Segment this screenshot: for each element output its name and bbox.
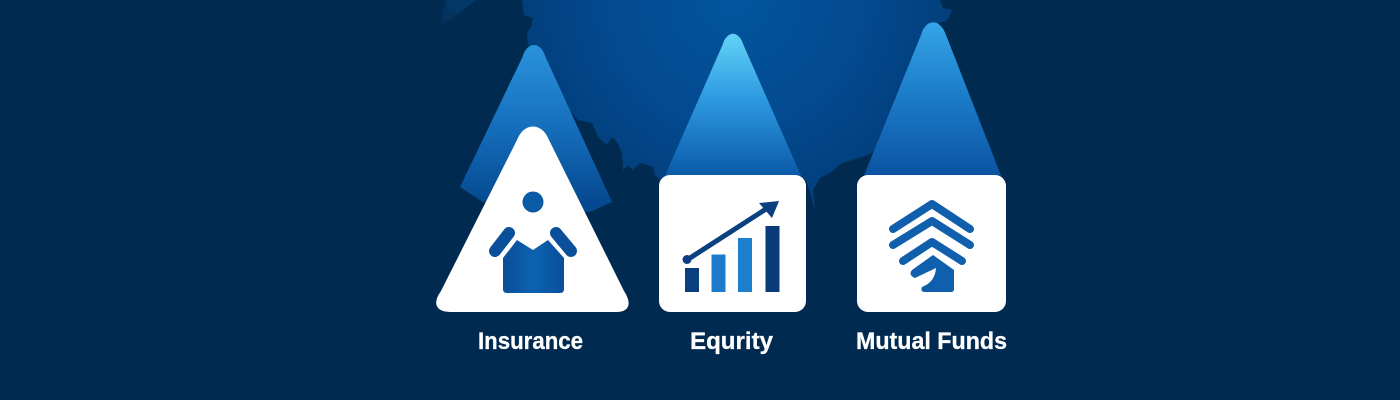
card: insurance: [436, 126, 629, 312]
card shape: white rounded square: [857, 175, 1006, 312]
background glow: top-left wisp: [438, 0, 476, 30]
icon: growth bar chart with arrow: [682, 201, 780, 292]
beam: equity: [664, 34, 802, 178]
label: Mutual Funds: Mutual Funds: [856, 328, 1007, 355]
beam: insurance: [460, 45, 612, 212]
card: mutual funds: [857, 175, 1006, 312]
beam: mutual funds: [863, 22, 1002, 178]
label: Insurance: Insurance: [478, 328, 583, 355]
icon: person and house: [495, 192, 571, 293]
card shape: white triangle: [436, 126, 629, 312]
icon: stacked chevrons and house: [893, 204, 970, 292]
card: equity: [659, 175, 806, 312]
label: Equrity: Equrity: [690, 328, 774, 355]
card shape: white rounded square: [659, 175, 806, 312]
background glow: jagged blue shape: [522, 0, 952, 212]
